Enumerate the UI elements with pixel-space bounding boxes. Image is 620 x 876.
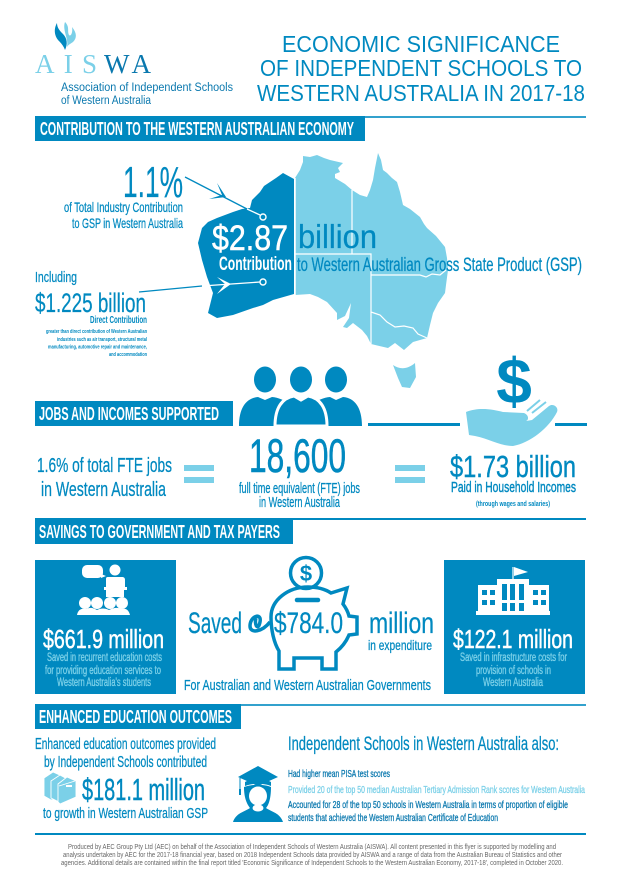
stat: 2.87 billion: Contribution [219,254,292,275]
text: enhanced outcomes [35,736,216,822]
icon: teacher and students [77,564,130,615]
logo: AISWA: WA [104,49,152,79]
stat: 18,600 [239,429,360,511]
stat: 1.225 billion direct: manufacturing, automotive repair and maintenance, [48,344,147,350]
heading: jobs and incomes [35,401,587,426]
panel: infrastructure savings: Western Australia [483,677,543,689]
stat: 1.1 percent: 1.1% [123,158,183,207]
footer [61,844,563,867]
stat: 1.6 percent: in Western Australia [41,479,167,501]
stat: 1.6 percent: 1.6% of total FTE jobs [37,455,172,477]
text: enhanced outcomes: to growth in Western Australian GSP [43,805,208,822]
stat: 18,600: 18,600 [249,429,346,482]
title [257,31,585,106]
heading: savings [35,518,586,544]
stat: 1.225 billion direct: and accommodation [109,352,147,358]
list: achievements [288,768,585,824]
heading: jobs and incomes: JOBS AND INCOMES SUPPORTED [39,404,219,424]
icon: people [239,366,362,426]
icon: school building [476,567,550,615]
stat: 1.73 billion: (through wages and salaries) [476,499,550,508]
stat: 1.225 billion direct: greater than direct contribution of Western Australian [46,329,147,335]
arrow: 1.1 percent to map [185,177,266,220]
logo: AISWA: of Western Australia [61,95,152,107]
heading: enhanced education outcomes [35,704,586,729]
list: achievements: students that achieved the Western Australian Certificate of Education [288,812,498,824]
icon: equals sign right [395,465,425,483]
heading: enhanced education outcomes: ENHANCED EDUCATION OUTCOMES [39,707,232,727]
heading: savings: SAVINGS TO GOVERNMENT AND TAX PAYERS [39,522,280,542]
stat: 2.87 billion: $2.87 [212,219,288,258]
panel: recurrent savings: Saved in recurrent education costs [47,652,162,664]
stat: 1.1 percent [64,158,183,231]
stat: 784.0 million saved: in expenditure [368,637,432,653]
stat: 1.6 percent [37,455,172,501]
logo: AISWA: AIS [35,49,97,79]
stat: 1.73 billion [450,449,576,508]
stat: 1.225 billion direct [35,269,147,358]
text: enhanced outcomes: $181.1 million [82,772,205,807]
heading: contribution to the economy: CONTRIBUTION TO THE WESTERN AUSTRALIAN ECONOMY [40,119,354,139]
panel: infrastructure savings: provision of schools in [476,665,551,677]
icon: piggy bank: $ [300,561,312,586]
stat: 784.0 million saved: million [369,607,434,640]
stat: 784.0 million saved [184,607,434,694]
panel: recurrent savings [35,560,176,694]
stat: 1.225 billion direct: $1.225 billion [35,288,146,318]
icon: graduate [233,766,283,822]
list: achievements: Had higher mean PISA test scores [288,768,390,780]
stat: 784.0 million saved: Saved [188,607,242,640]
panel: recurrent savings: $661.9 million [43,624,164,654]
stat: 2.87 billion: billion [298,218,377,255]
stat: 784.0 million saved: For Australian and Western Australian Governments [184,677,431,694]
panel: infrastructure savings: Saved in infrastructure costs for [460,652,567,664]
stat: 1.1 percent: to GSP in Western Australia [72,215,183,231]
arrow: 1.225 billion to map [139,277,266,294]
text: enhanced outcomes: Enhanced education outcomes provided [35,736,216,753]
panel: infrastructure savings [444,560,585,694]
panel: recurrent savings: for providing education services to [45,665,161,677]
stat: 18,600: full time equivalent (FTE) jobs [239,481,360,497]
title: ECONOMIC SIGNIFICANCE [282,31,560,57]
icon: hand with dollar [466,345,557,446]
panel: recurrent savings: Western Australia's students [57,677,151,689]
title: WESTERN AUSTRALIA IN 2017-18 [257,80,585,106]
stat: 2.87 billion [212,218,582,276]
stat: 1.225 billion direct: Direct Contribution [90,315,147,326]
title: OF INDEPENDENT SCHOOLS TO [260,55,582,81]
logo: AISWA: Association of Independent Schools [61,82,233,94]
map of Australia [198,153,448,388]
stat: 1.225 billion direct: industries such as air transport, structural metal [57,337,147,343]
logo: AISWA [35,22,233,107]
icon: flame [55,22,76,50]
icon: books [44,772,76,804]
stat: 1.225 billion direct: Including [35,269,77,286]
icon: hand with dollar: $ [496,345,532,417]
stat: 18,600: in Western Australia [259,495,341,511]
stat: 1.1 percent: of Total Industry Contribution [64,199,183,215]
stat: 1.73 billion: $1.73 billion [450,449,576,484]
stat: 784.0 million saved: $784.0 [274,607,343,640]
icon: equals sign left [184,465,214,483]
icon: piggy bank [250,558,357,669]
text: enhanced outcomes: by Independent Schools contributed [44,754,207,771]
panel: infrastructure savings: $122.1 million [453,624,573,654]
